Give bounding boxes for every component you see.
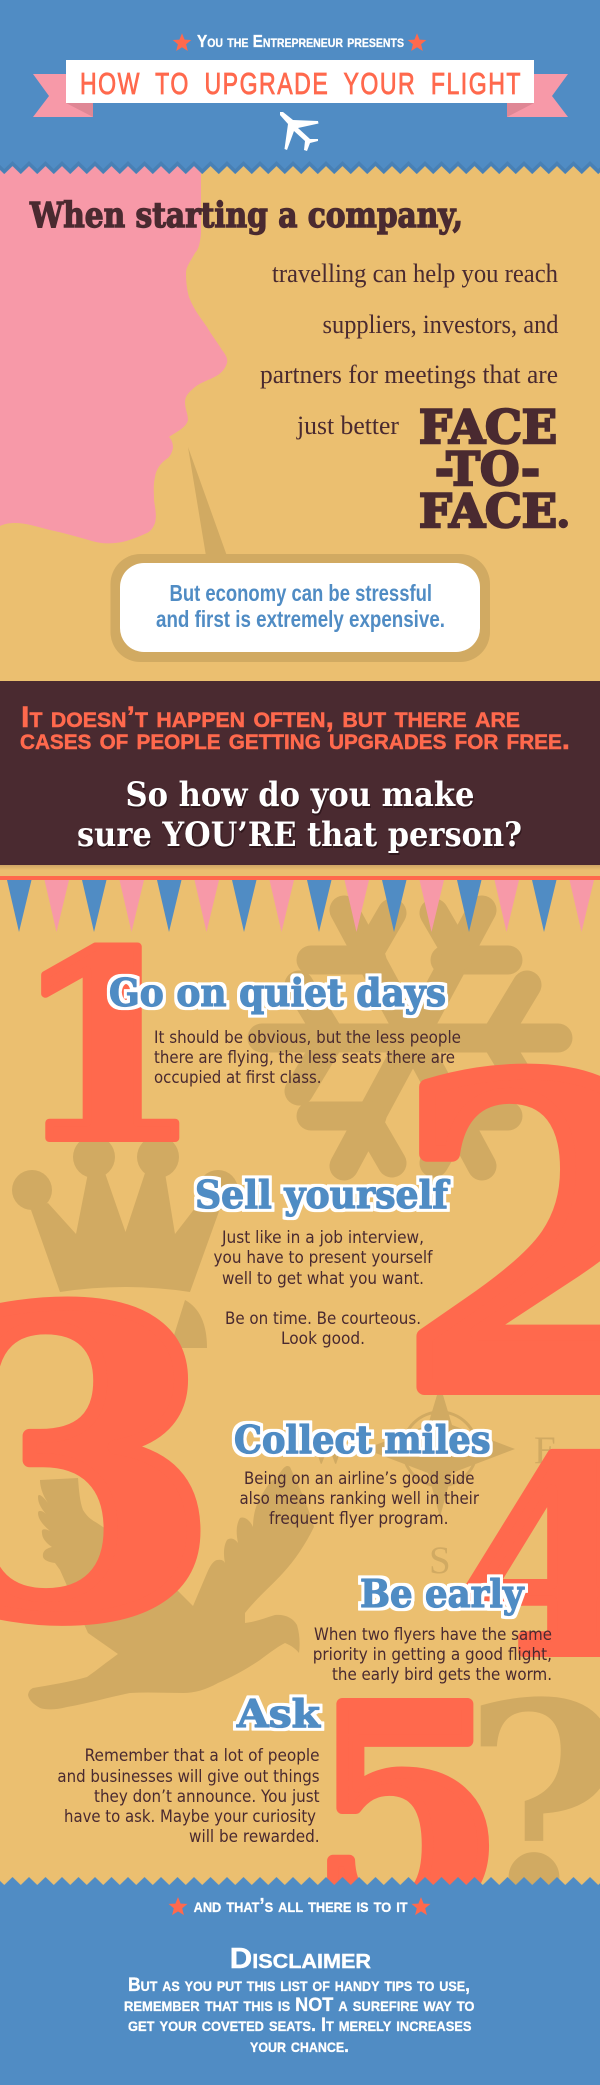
star left bbox=[168, 1897, 188, 1915]
tip 2 text: Be on time. Be courteous. bbox=[225, 1309, 421, 1328]
tip 4: be early bbox=[313, 1571, 552, 1684]
tip 3 heading: Collect miles bbox=[234, 1417, 490, 1462]
banner question: So how do you make bbox=[126, 775, 474, 815]
compass letters: N bbox=[423, 1319, 451, 1362]
disclaimer heading: Disclaimer bbox=[230, 1943, 372, 1975]
bunting string bbox=[0, 876, 600, 880]
bubble pointer bbox=[188, 447, 227, 556]
tip 5 text: will be rewarded. bbox=[189, 1827, 320, 1846]
body line 2: suppliers, investors, and bbox=[322, 310, 558, 339]
tip 2 text: Just like in a job interview, bbox=[221, 1228, 424, 1247]
bunting bbox=[0, 876, 600, 932]
compass letters: W bbox=[310, 1429, 347, 1472]
dark banner bbox=[0, 681, 600, 870]
banner coral text: cases of people getting upgrades for free. bbox=[20, 723, 570, 756]
disclaimer text bbox=[124, 1974, 475, 2057]
ribbon title panel bbox=[66, 60, 534, 103]
compass letters: S bbox=[429, 1539, 451, 1582]
bubble border bbox=[110, 554, 490, 662]
tip 2 text: you have to present yourself bbox=[214, 1248, 434, 1267]
emphasis: face to face: FACE bbox=[419, 484, 557, 538]
emphasis: face to face: . bbox=[556, 488, 571, 537]
star right bbox=[408, 33, 426, 51]
disclaimer text: But as you put this list of handy tips to use, bbox=[128, 1974, 470, 1996]
tip 2: sell yourself bbox=[195, 1172, 451, 1348]
star left bbox=[173, 33, 191, 51]
disclaimer text: your chance. bbox=[250, 2035, 349, 2057]
tip 5 heading: Ask bbox=[236, 1691, 321, 1736]
body line 1: travelling can help you reach bbox=[272, 259, 558, 288]
tip 1: go on quiet days bbox=[109, 970, 461, 1087]
header bbox=[0, 0, 600, 176]
tip 1 text: there are flying, the less seats there are bbox=[154, 1048, 455, 1067]
emphasis: face to face bbox=[419, 400, 571, 538]
tip 1 text bbox=[154, 1028, 461, 1087]
banner question: sure YOU’RE that person? bbox=[77, 815, 522, 855]
tip 2 text bbox=[214, 1228, 434, 1348]
ribbon tail right bbox=[507, 74, 568, 117]
tip 3: collect miles bbox=[234, 1417, 490, 1528]
star right bbox=[412, 1897, 430, 1915]
compass star bbox=[365, 1385, 515, 1517]
banner background bbox=[0, 681, 600, 865]
compass letters: E bbox=[534, 1429, 558, 1472]
tip 1 text: It should be obvious, but the less people bbox=[154, 1028, 461, 1047]
tip 5 text: Remember that a lot of people bbox=[85, 1746, 320, 1765]
bubble text bbox=[156, 580, 445, 632]
emphasis: face to face: -TO- bbox=[435, 442, 540, 496]
tip 2 heading: Sell yourself bbox=[195, 1172, 451, 1217]
footer zigzag edge bbox=[0, 1877, 600, 1887]
emphasis: face to face: FACE bbox=[419, 400, 557, 454]
tip 5 text: have to ask. Maybe your curiosity bbox=[64, 1807, 316, 1826]
tip 4 text: priority in getting a good flight, bbox=[313, 1645, 552, 1664]
closing text: and that’s all there is to it bbox=[194, 1895, 408, 1917]
header background bbox=[0, 0, 600, 160]
footer bbox=[0, 1877, 600, 2085]
disclaimer text: remember that this is NOT a surefire way to bbox=[124, 1994, 475, 2016]
tip 4 text: When two flyers have the same bbox=[314, 1625, 552, 1644]
header zigzag edge bbox=[0, 160, 600, 176]
tip 1 heading: Go on quiet days bbox=[109, 970, 446, 1015]
tip 5 text: they don’t announce. You just bbox=[94, 1787, 320, 1806]
pink head silhouette bbox=[0, 160, 227, 543]
tip 3 text: frequent flyer program. bbox=[269, 1509, 448, 1528]
presents text: You the Entrepreneur presents bbox=[197, 31, 404, 51]
speech bubble bbox=[110, 447, 490, 662]
heading: when starting a company: When starting a company, bbox=[29, 195, 463, 236]
footer background bbox=[0, 1885, 600, 2085]
icon: compass bbox=[310, 1319, 558, 1582]
bunting flags pink bbox=[44, 880, 594, 932]
banner question bbox=[77, 775, 522, 855]
tip 1 text: occupied at first class. bbox=[154, 1068, 322, 1087]
tip 5 text bbox=[57, 1746, 320, 1846]
body line 4: just better bbox=[296, 411, 399, 440]
tip 5: ask bbox=[57, 1691, 321, 1846]
icon: airplane bbox=[280, 112, 318, 151]
bubble text: and first is extremely expensive. bbox=[156, 606, 445, 632]
disclaimer text: get your coveted seats. It merely increases bbox=[128, 2014, 472, 2036]
tip 3 text bbox=[240, 1469, 479, 1528]
tip 5 text: and businesses will give out things bbox=[57, 1767, 320, 1786]
tip 2 text: Look good. bbox=[281, 1329, 365, 1348]
bunting flags blue bbox=[7, 880, 556, 932]
bubble text: But economy can be stressful bbox=[170, 580, 432, 606]
tip 4 heading: Be early bbox=[360, 1571, 524, 1616]
banner coral text bbox=[20, 701, 570, 756]
compass letters bbox=[310, 1319, 558, 1582]
icon: dove bbox=[28, 1466, 314, 1709]
tip 3 text: Being on an airline’s good side bbox=[244, 1469, 474, 1488]
banner coral text: It doesn’t happen often, but there are bbox=[21, 701, 520, 734]
tip 4 text: the early bird gets the worm. bbox=[332, 1665, 552, 1684]
tip 2 text: well to get what you want. bbox=[222, 1269, 424, 1288]
compass ring bbox=[403, 1412, 477, 1486]
tip 4 text bbox=[313, 1625, 552, 1684]
icon: snowflake bbox=[262, 910, 558, 1166]
big numeral 1: 1 bbox=[12, 895, 202, 1199]
body line 3: partners for meetings that are bbox=[260, 360, 558, 389]
bubble fill bbox=[120, 563, 480, 652]
tip 3 text: also means ranking well in their bbox=[240, 1489, 479, 1508]
icon: crown bbox=[12, 1136, 238, 1348]
ribbon tail left bbox=[33, 74, 93, 117]
big numeral 5: 5 bbox=[310, 1644, 504, 1982]
main statement bbox=[29, 195, 571, 538]
